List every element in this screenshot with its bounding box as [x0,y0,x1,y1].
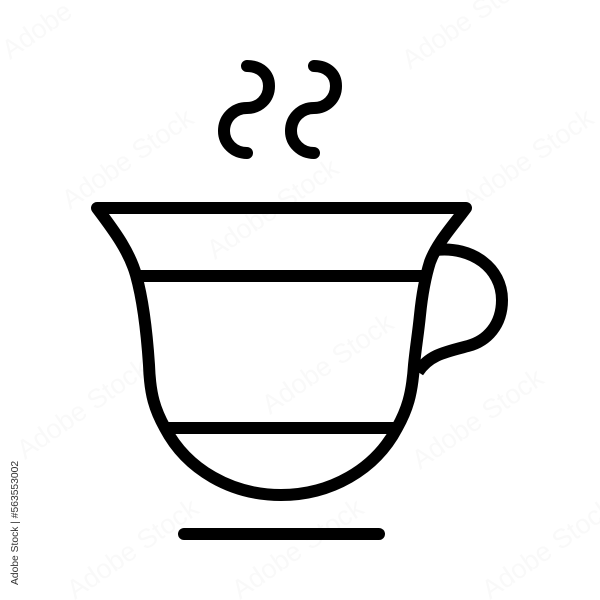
stock credit text: Adobe Stock | #563553002 [10,461,21,585]
cup handle [418,250,502,372]
watermark pattern: Adobe Stock [456,102,599,215]
watermark pattern: Adobe Stock [406,362,549,475]
cup band: upper [136,270,426,282]
cup band: lower [165,422,397,434]
steam: right [291,66,336,153]
watermark pattern: Adobe Stock [256,307,399,420]
watermark pattern: Adobe Stock [56,102,199,215]
watermark pattern: Adobe Stock [11,352,154,465]
icon: coffee cup [97,66,502,534]
steam: left [224,66,269,153]
cup body [97,208,466,495]
saucer line [184,528,379,540]
watermark pattern: Adobe Stock [201,152,344,265]
